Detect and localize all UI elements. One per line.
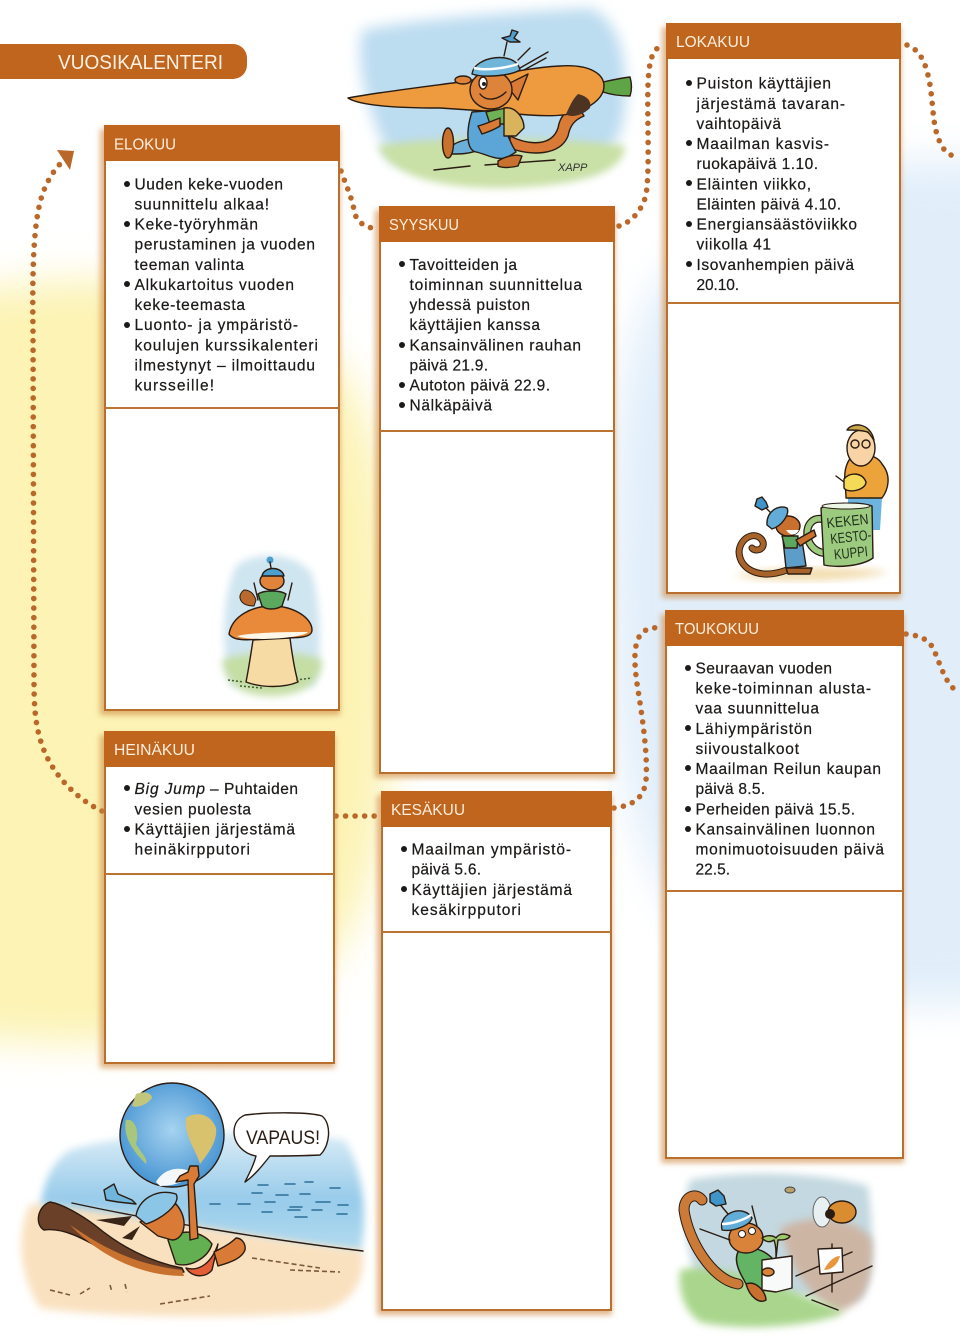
text list: käyttäjien kanssa (410, 317, 540, 334)
text list: vaa suunnittelua (696, 701, 819, 718)
carrot (348, 66, 604, 116)
hair tuft (96, 1216, 140, 1240)
shoreline (72, 1203, 363, 1251)
divider (666, 890, 903, 892)
arrow: September to October (619, 44, 665, 226)
landmass right (186, 1114, 216, 1164)
box (382, 792, 611, 1310)
arrow: June to May (614, 627, 660, 808)
foot front (498, 155, 522, 168)
text list: Isovanhempien päivä (696, 257, 854, 274)
man sweater (845, 455, 888, 498)
landmass left (125, 1120, 146, 1164)
header bar (665, 610, 904, 646)
smile (786, 530, 799, 534)
man jeans (848, 498, 882, 530)
illustration: mushroom (222, 556, 322, 696)
text list: keke-toiminnan alusta- (696, 681, 871, 698)
sand wash (21, 1204, 363, 1316)
text list: Nälkäpäivä (410, 398, 492, 415)
face (140, 1204, 184, 1240)
mug (821, 503, 873, 566)
hat stripe (722, 1215, 751, 1224)
illustration: mug (734, 425, 888, 581)
heading: TOUKOKUU (675, 621, 759, 638)
tail (240, 590, 256, 606)
landmass top (132, 1092, 152, 1107)
text list: Keke-työryhmän (134, 217, 258, 234)
overalls (783, 540, 806, 568)
sky wash (360, 8, 626, 170)
box (105, 732, 334, 1063)
text list: 22.5. (696, 862, 730, 879)
arrow head (57, 150, 74, 170)
eye (479, 77, 487, 89)
arrow: July to June (336, 813, 378, 819)
pompom (710, 1190, 726, 1206)
grass wash (222, 652, 322, 696)
text list: Eläinten viikko, (696, 176, 811, 193)
feet (786, 568, 812, 574)
text list: keke-teemasta (134, 297, 245, 314)
box (667, 24, 900, 593)
antarctica cloud (156, 1169, 192, 1186)
text list: vesien puolesta (134, 801, 251, 818)
text list: Käyttäjien järjestämä (412, 882, 572, 899)
cap underside (237, 632, 308, 639)
hand (455, 76, 471, 84)
divider (105, 407, 339, 409)
speech bubble (234, 1113, 329, 1182)
grass wash (378, 138, 625, 188)
text list: siivoustalkoot (696, 741, 800, 758)
tail lower (70, 1225, 184, 1276)
hat (472, 58, 520, 76)
sea wash (40, 1132, 364, 1254)
panel: toukokuu (661, 610, 904, 1163)
body (258, 591, 286, 609)
shadow (662, 27, 901, 598)
panel: lokakuu (662, 23, 901, 598)
panel: syyskuu (375, 206, 615, 778)
sign (818, 1248, 843, 1274)
box (380, 207, 614, 773)
grass wash (680, 1268, 845, 1327)
text list: viikolla 41 (696, 237, 771, 254)
pompom (266, 556, 274, 564)
left hand (104, 1184, 136, 1204)
text list (410, 257, 582, 415)
text list: Lähiympäristön (696, 721, 812, 738)
text list: – Puhtaiden (210, 781, 298, 798)
divider (380, 430, 614, 432)
grass marks (228, 678, 312, 688)
sand marks (50, 1258, 340, 1304)
soil wash (780, 1219, 872, 1312)
cutlery (254, 583, 292, 600)
text list: Maailman Reilun kaupan (696, 761, 881, 778)
signature: XAPP (557, 162, 588, 174)
header bar (104, 125, 340, 161)
text list: Energiansäästöviikko (696, 217, 857, 234)
illustration: globe (21, 1083, 364, 1316)
bullets (686, 80, 692, 267)
hat band (474, 64, 518, 69)
shadow (661, 614, 904, 1163)
text list: yhdessä puiston (410, 297, 530, 314)
text list: vaihtopäivä (696, 116, 781, 133)
soil on carrot (566, 94, 590, 116)
sign post (831, 1244, 833, 1292)
muzzle (480, 92, 506, 99)
bullets (401, 846, 407, 892)
raised arm (176, 1166, 199, 1240)
hand (762, 1268, 774, 1276)
ear hair (700, 1206, 757, 1240)
tail (739, 536, 787, 574)
heading: HEINÄKUU (114, 741, 195, 759)
shirt (168, 1232, 212, 1265)
eyes (738, 1228, 756, 1238)
heading: ELOKUU (114, 136, 176, 154)
text list: 20.10. (696, 277, 739, 294)
man head (847, 430, 875, 466)
bullets (685, 665, 691, 832)
text list: Uuden keke-vuoden (134, 176, 283, 194)
text list (696, 76, 857, 294)
illustration: seedling (680, 1174, 872, 1327)
stem (603, 77, 632, 96)
arrow: October onward (907, 45, 958, 157)
text list: toiminnan suunnittelua (410, 277, 582, 294)
bee wings (813, 1197, 831, 1227)
text list: Eläinten päivä 4.10. (696, 196, 841, 214)
pupil (482, 82, 486, 86)
shadow (375, 210, 615, 778)
mug label: KEKEN (826, 512, 869, 532)
mug rim (822, 503, 870, 509)
title banner (0, 44, 247, 79)
mug handle fill (807, 519, 824, 553)
panel: heinäkuu (100, 731, 335, 1068)
text list: ruokapäivä 1.10. (696, 156, 818, 173)
text list: Luonto- ja ympäristö- (134, 317, 298, 334)
divider (667, 302, 900, 304)
hat stalk (504, 42, 507, 56)
text list: koulujen kurssikalenteri (134, 337, 318, 354)
illustration: carrot (348, 8, 632, 188)
foot back (442, 128, 454, 158)
text list: perustaminen ja vuoden (134, 237, 315, 254)
text list: Puiston käyttäjien (696, 76, 831, 93)
arrow: August to September (341, 171, 377, 229)
header bar (666, 23, 901, 59)
text list: järjestämä tavaran- (696, 96, 845, 113)
background: blue wash (612, 161, 960, 1004)
pompom (755, 497, 768, 510)
arm (478, 118, 500, 134)
sky wash (685, 1174, 872, 1300)
tail fill (739, 536, 787, 574)
panel: elokuu (100, 125, 340, 715)
globe (120, 1083, 224, 1187)
text list: ilmestynyt – ilmoittaudu (134, 357, 315, 374)
heading: SYYSKUU (389, 217, 459, 234)
hat stalk (270, 562, 271, 568)
text list: Käyttäjien järjestämä (134, 822, 295, 838)
foot (746, 1283, 766, 1301)
mushroom cap (229, 606, 312, 640)
text list: Tavoitteiden ja (410, 257, 517, 274)
leg and foot (214, 1238, 245, 1266)
head (260, 572, 284, 590)
hat (262, 568, 284, 576)
man hair (847, 425, 874, 440)
plant (762, 1234, 790, 1258)
text list: heinäkirpputori (134, 842, 250, 859)
bee head (825, 1209, 835, 1219)
shadow (377, 795, 612, 1315)
shorts (186, 1244, 218, 1276)
mushroom stem (246, 638, 298, 686)
text list: Seuraavan vuoden (696, 660, 832, 678)
ground marks (434, 160, 555, 170)
swim cap (136, 1192, 177, 1224)
mug handle (807, 519, 824, 553)
plant box (762, 1256, 792, 1292)
text list: Alkukartoitus vuoden (134, 277, 294, 294)
sky wash (224, 556, 320, 686)
text list: Big Jump (134, 781, 205, 798)
arrow: May onward (906, 634, 960, 694)
text list: monimuotoisuuden päivä (696, 842, 884, 859)
text list: teeman valinta (134, 257, 244, 274)
head (729, 1223, 763, 1253)
sign carrot (824, 1256, 840, 1270)
text list: Kansainvälinen rauhan (410, 337, 581, 354)
tail (38, 1202, 184, 1274)
fly (785, 1187, 795, 1193)
shadow (100, 735, 335, 1068)
arrow: dotted return path to August (33, 150, 102, 811)
text list (134, 781, 298, 859)
heading: LOKAKUU (676, 34, 750, 51)
box (105, 126, 339, 710)
header bar (379, 206, 615, 242)
text list: päivä 5.6. (412, 862, 481, 879)
shirt (486, 108, 506, 124)
hat stalk (764, 506, 772, 514)
teapot (836, 474, 866, 491)
text list (134, 176, 318, 394)
text list: kursseille! (134, 378, 214, 394)
text list: Autoton päivä 22.9. (410, 378, 550, 394)
tail fill (684, 1196, 738, 1284)
glasses (851, 440, 870, 448)
header bar (381, 791, 612, 827)
bullets (124, 181, 130, 328)
bubble text: VAPAUS! (246, 1128, 320, 1149)
ear and hair (506, 74, 528, 100)
text list: Maailman ympäristö- (412, 842, 571, 859)
header bar (104, 731, 335, 767)
text list (696, 660, 884, 879)
divider (105, 873, 334, 875)
ground (734, 568, 888, 581)
mug label (826, 512, 874, 564)
text list: suunnittelu alkaa! (134, 196, 269, 214)
hat stalk (718, 1202, 728, 1214)
mug label: KESTO- (830, 528, 872, 548)
text list: kesäkirpputori (412, 902, 521, 919)
text list: Maailman kasvis- (696, 136, 829, 153)
heading: KESÄKUU (391, 801, 465, 819)
bee (828, 1201, 856, 1223)
mug label: KUPPI (833, 544, 869, 564)
head (470, 71, 512, 109)
backpack (504, 108, 524, 136)
hat (722, 1211, 752, 1230)
hair tufts (518, 48, 548, 70)
box (666, 611, 903, 1158)
bullets (124, 785, 130, 832)
text list: päivä 21.9. (410, 357, 488, 374)
leg back (452, 138, 478, 154)
hat (767, 507, 788, 529)
head (776, 516, 800, 536)
text list (412, 842, 572, 919)
wave marks (210, 1182, 348, 1217)
arm (796, 530, 816, 546)
background: yellow wash (0, 281, 392, 1043)
soil furrows (796, 1252, 872, 1310)
shirt (782, 536, 798, 548)
overalls (468, 110, 516, 158)
tail (510, 106, 584, 153)
pompom (502, 30, 520, 42)
text list: Kansainvälinen luonnon (696, 822, 875, 838)
shadow (100, 129, 340, 715)
divider (382, 931, 611, 933)
panel: kesäkuu (377, 791, 612, 1315)
text list: Perheiden päivä 15.5. (696, 801, 855, 818)
bullets (399, 261, 405, 408)
tail (684, 1196, 738, 1284)
text list: päivä 8.5. (696, 781, 765, 798)
body (736, 1248, 772, 1290)
title text: VUOSIKALENTERI (58, 51, 223, 74)
